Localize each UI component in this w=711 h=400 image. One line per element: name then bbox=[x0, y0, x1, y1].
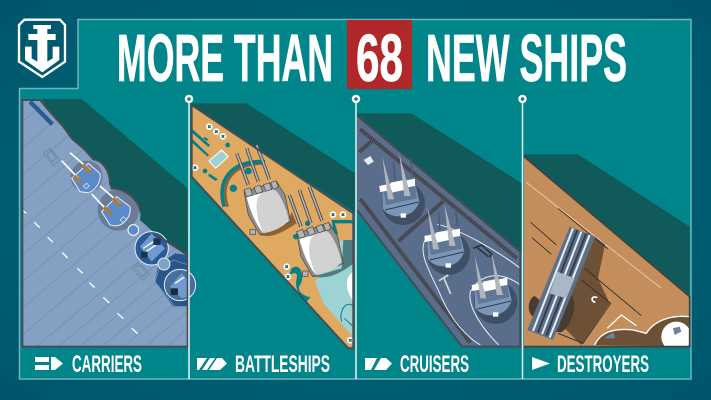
label: carriers bbox=[35, 351, 142, 378]
torpedo tubes bbox=[527, 227, 595, 340]
label: battleships bbox=[197, 351, 330, 378]
turret 2 bbox=[92, 186, 130, 226]
battleship hull outline bbox=[192, 105, 353, 348]
column dividers bbox=[189, 99, 522, 379]
crane bbox=[473, 245, 492, 257]
battleship stern and fittings bbox=[192, 105, 354, 348]
white fitting markers bbox=[192, 123, 354, 344]
battleship shadow on water bbox=[192, 103, 355, 212]
cruiser turrets bbox=[379, 154, 517, 324]
cruisers text: CRUISERS bbox=[400, 351, 469, 378]
fitting marker crosses bbox=[194, 125, 352, 342]
aircraft lift outlines bbox=[43, 148, 150, 280]
logo: anchor shield bbox=[19, 20, 65, 77]
title box: 68 bbox=[347, 20, 412, 89]
turret 2 bbox=[424, 204, 470, 275]
turret 1 bbox=[237, 145, 291, 235]
deck edge detail bbox=[30, 102, 52, 124]
bottom stern shapes bbox=[594, 314, 689, 346]
turret 1 bbox=[379, 154, 425, 225]
deck outline detail bbox=[558, 268, 641, 343]
carrier deck bbox=[22, 100, 188, 347]
white deck lines bbox=[423, 224, 520, 345]
deck markings: landing dashes bbox=[23, 211, 138, 334]
gun tubs shadow bbox=[71, 161, 139, 231]
icon: battleship class bbox=[197, 358, 227, 370]
stern outline details bbox=[341, 304, 353, 327]
divider pins bbox=[186, 96, 526, 102]
carrier hull outline bbox=[22, 100, 188, 347]
icon: destroyer class bbox=[532, 357, 550, 370]
destroyer hull outline bbox=[524, 157, 690, 347]
panel: cruisers bbox=[357, 113, 522, 347]
title bbox=[117, 21, 627, 96]
destroyer shadow on water bbox=[524, 154, 690, 297]
panel: battleships bbox=[192, 103, 355, 348]
white c marking bbox=[592, 297, 597, 302]
deck planks bbox=[22, 105, 188, 347]
icon: carrier class bbox=[35, 357, 63, 370]
battleship turrets bbox=[237, 145, 356, 277]
cruiser shadow on water bbox=[357, 113, 522, 252]
destroyer deck bbox=[524, 157, 690, 347]
light stern section bbox=[315, 240, 353, 337]
title number: 68 bbox=[356, 21, 403, 96]
small hatch bbox=[209, 150, 228, 168]
turret 3 bbox=[472, 253, 517, 324]
deck lines bbox=[526, 182, 661, 288]
carriers text: CARRIERS bbox=[72, 351, 142, 378]
carrier shadow on water bbox=[42, 99, 188, 258]
title text: more than: MORE THAN bbox=[117, 21, 333, 96]
dark equipment bbox=[529, 295, 574, 332]
small deck equipment bbox=[439, 275, 451, 294]
white stern shape bbox=[347, 272, 353, 302]
panel: destroyers bbox=[524, 154, 691, 352]
rail tracks bbox=[359, 129, 517, 343]
battleship deck bbox=[192, 105, 353, 348]
icon: cruiser class bbox=[365, 358, 392, 370]
turret 2 bbox=[289, 187, 343, 277]
cruiser hull outline bbox=[357, 116, 520, 347]
panel: carriers bbox=[22, 99, 196, 347]
label: destroyers bbox=[532, 351, 649, 378]
round gun mounts bbox=[128, 225, 196, 307]
label: cruisers bbox=[365, 351, 469, 378]
turret shadows bbox=[260, 212, 297, 236]
searchlight bbox=[364, 156, 374, 165]
turret 1 bbox=[62, 153, 100, 193]
cruiser deck bbox=[357, 116, 520, 347]
battleships text: BATTLESHIPS bbox=[235, 351, 330, 378]
dark deck lines bbox=[531, 208, 608, 254]
deck details in teal bbox=[192, 128, 353, 302]
dark shadow under tubes bbox=[560, 237, 610, 345]
